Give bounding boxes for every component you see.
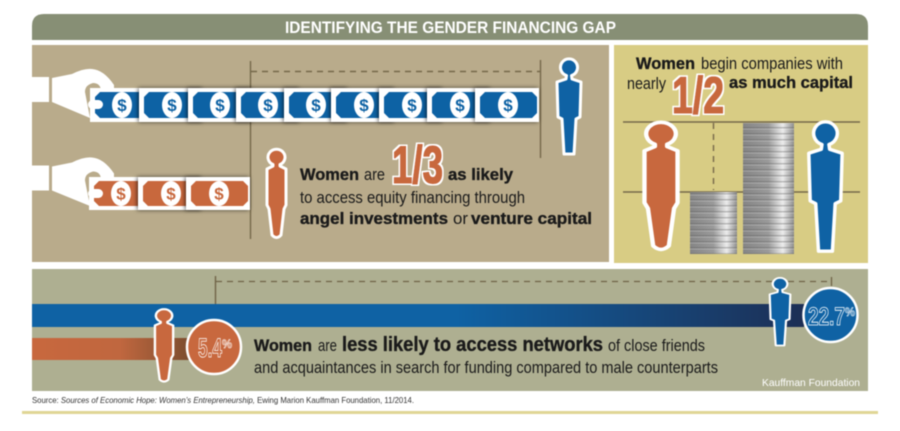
row of three orange bills: $ bbox=[116, 184, 126, 204]
short coin stack bbox=[690, 192, 737, 254]
equity text block: are bbox=[364, 165, 385, 184]
row of nine blue bills: $ bbox=[263, 96, 273, 115]
capital text block: nearly bbox=[627, 74, 666, 93]
capital text block: begin companies with bbox=[701, 54, 843, 73]
row of nine blue bills: $ bbox=[167, 96, 177, 115]
icon: woman, orange bbox=[644, 122, 678, 249]
icon: man, blue bbox=[809, 122, 842, 251]
thumb on orange bill bbox=[88, 189, 103, 198]
row of three orange bills bbox=[89, 177, 250, 210]
capital guide lines bbox=[623, 122, 860, 192]
row of nine blue bills: $ bbox=[311, 96, 321, 115]
panel: equity financing bbox=[30, 45, 609, 262]
equity text block: venture capital bbox=[471, 209, 592, 228]
icon: man, blue bbox=[557, 59, 581, 154]
networks text block bbox=[254, 334, 718, 377]
capital text block: Women bbox=[636, 54, 695, 73]
row of nine blue bills: $ bbox=[503, 96, 513, 115]
bottom rule bbox=[22, 411, 878, 414]
equity text block bbox=[300, 136, 592, 228]
networks text block: Women bbox=[254, 336, 312, 355]
equity text block: as likely bbox=[448, 165, 514, 184]
networks text block: and acquaintances in search for funding compared to male counterparts bbox=[254, 358, 718, 377]
circle: 5.4%: 5.4 bbox=[198, 333, 222, 363]
thumb on blue bill bbox=[88, 100, 103, 109]
title: IDENTIFYING THE GENDER FINANCING GAP bbox=[285, 18, 616, 37]
row of three orange bills: $ bbox=[166, 184, 176, 204]
icon: woman, orange bbox=[155, 309, 173, 382]
row of nine blue bills: $ bbox=[407, 96, 417, 115]
row of nine blue bills bbox=[90, 88, 539, 122]
row of nine blue bills: $ bbox=[215, 96, 225, 115]
tall coin stack bbox=[743, 123, 794, 254]
comparison guide lines bbox=[250, 60, 540, 239]
row of three orange bills: $ bbox=[214, 184, 224, 204]
hand holding blue bills bbox=[30, 69, 114, 118]
icon: woman, orange bbox=[267, 149, 286, 238]
networks text block: less likely to access networks bbox=[342, 334, 603, 356]
blue bar bbox=[32, 304, 804, 327]
row of nine blue bills: $ bbox=[117, 96, 127, 115]
networks text block: of close friends bbox=[608, 336, 705, 355]
circle: 5.4%: % bbox=[222, 337, 232, 351]
source line: Source: Sources of Economic Hope: Women’s Entrepreneurship, Ewing Marion Kauffman Foundation, 11/2014. bbox=[32, 395, 414, 405]
circle: 5.4% bbox=[187, 320, 241, 374]
hand holding orange bills bbox=[30, 157, 114, 206]
equity text block: to access equity financing through bbox=[300, 188, 525, 207]
capital text block bbox=[627, 54, 853, 125]
panel: networks bbox=[32, 269, 868, 391]
row of nine blue bills: $ bbox=[359, 96, 369, 115]
credit: Kauffman Foundation bbox=[762, 377, 860, 389]
capital text block: as much capital bbox=[729, 73, 853, 92]
icon: man, blue bbox=[770, 278, 790, 345]
circle: 22.7% bbox=[804, 288, 858, 342]
header banner bbox=[32, 14, 868, 40]
circle: 22.7%: 22.7 bbox=[808, 303, 845, 331]
guide lines bbox=[216, 276, 832, 322]
orange bar bbox=[32, 338, 192, 360]
panel: starting capital bbox=[614, 45, 868, 263]
equity text block: or bbox=[453, 209, 468, 228]
big fraction 1/2: 1/2 bbox=[672, 67, 724, 125]
row of nine blue bills: $ bbox=[455, 96, 465, 115]
networks text block: are bbox=[318, 336, 337, 355]
equity text block: angel investments bbox=[300, 209, 448, 228]
equity text block: Women bbox=[300, 165, 359, 184]
big fraction 1/3: 1/3 bbox=[392, 136, 443, 195]
circle: 22.7%: % bbox=[845, 305, 855, 319]
